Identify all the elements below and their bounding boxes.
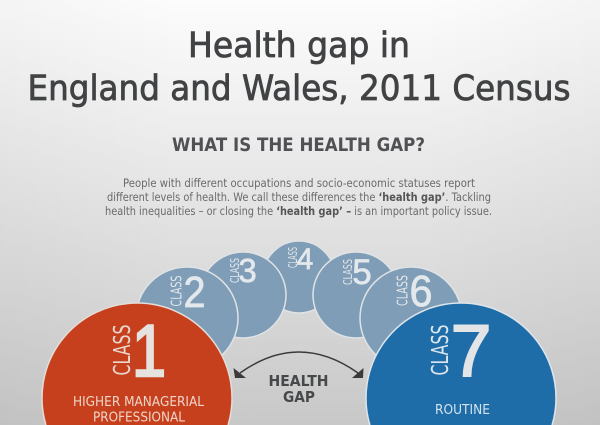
class 7 circle: CLASS bbox=[428, 325, 454, 375]
intro text: People with different occupations and socio-economic statuses report bbox=[123, 176, 475, 190]
class 6 circle bbox=[360, 267, 462, 369]
class 7 circle: ROUTINE bbox=[435, 403, 490, 418]
class 2 circle: CLASS bbox=[168, 276, 186, 306]
class 1 circle bbox=[42, 303, 232, 425]
class 1 circle: HIGHER MANAGERIAL bbox=[73, 395, 205, 410]
class 4 circle bbox=[263, 241, 335, 313]
class 6 circle: 6 bbox=[410, 267, 432, 316]
class 5 circle: CLASS bbox=[341, 259, 355, 285]
class 1 circle: CLASS bbox=[110, 325, 136, 375]
class 6 circle: CLASS bbox=[394, 275, 412, 306]
class 3 circle: 3 bbox=[238, 252, 257, 289]
class 7 circle: 7 bbox=[451, 311, 491, 392]
class 4 circle: CLASS bbox=[286, 247, 300, 268]
intro text: different levels of health. We call these differences the ‘health gap’. Tackling bbox=[107, 190, 491, 204]
label: health gap bbox=[268, 372, 328, 406]
class 2 circle: 2 bbox=[184, 268, 206, 317]
title: Health gap in bbox=[188, 26, 410, 66]
class 3 circle bbox=[200, 252, 286, 338]
label: health gap: HEALTH bbox=[268, 372, 328, 390]
class 5 circle bbox=[313, 252, 399, 338]
title: England and Wales, 2011 Census bbox=[28, 69, 570, 109]
class 7 circle bbox=[366, 303, 556, 425]
heading: what is the health gap: WHAT IS THE HEALTH GAP? bbox=[172, 134, 425, 156]
intro text: health inequalities – or closing the ‘health gap’ – is an important policy issue. bbox=[105, 204, 492, 218]
class 3 circle: CLASS bbox=[228, 258, 242, 283]
class 1 circle: 1 bbox=[132, 311, 166, 392]
label: health gap: GAP bbox=[283, 388, 315, 406]
class 4 circle: 4 bbox=[297, 243, 313, 276]
class 2 circle bbox=[136, 267, 238, 369]
class 5 circle: 5 bbox=[352, 253, 372, 292]
intro text bbox=[105, 176, 492, 218]
arrow: health gap double arrow bbox=[234, 352, 364, 378]
title bbox=[28, 26, 570, 109]
